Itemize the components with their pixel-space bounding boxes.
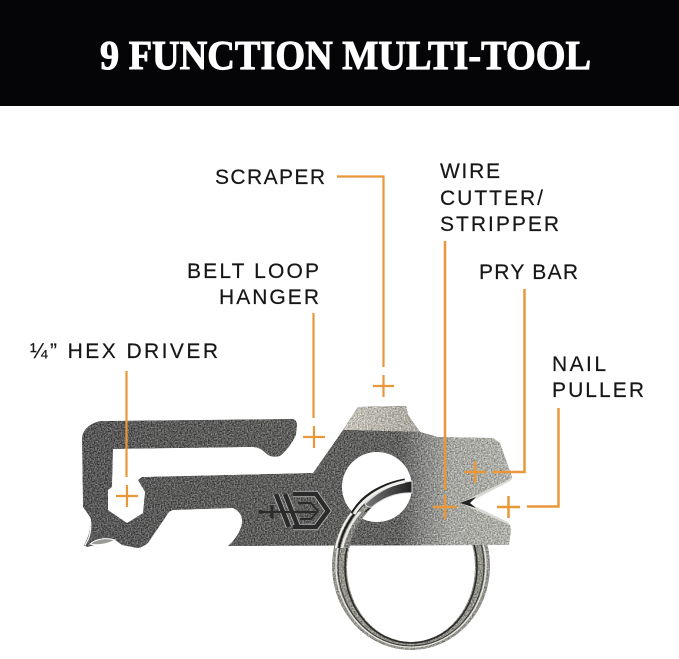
ring band inside hole — [365, 481, 412, 507]
Gerber logo — [259, 494, 328, 527]
callout: hex driver — [116, 371, 138, 507]
label: wire cutter/stripper: WIRE — [440, 160, 500, 183]
ring highlight over hole edge — [353, 481, 405, 514]
callout: nail puller — [497, 408, 558, 518]
multi-tool body — [82, 406, 512, 548]
label: belt loop hanger: BELT LOOP — [187, 260, 319, 283]
label: wire cutter/stripper: CUTTER/ — [440, 187, 543, 210]
label: wire cutter/stripper: STRIPPER — [440, 213, 559, 236]
label: belt loop hanger: HANGER — [219, 286, 319, 309]
label: belt loop hanger — [187, 260, 319, 309]
callout: scraper — [337, 176, 394, 397]
label: nail puller: PULLER — [552, 379, 644, 402]
callout: wire cutter — [433, 241, 457, 519]
scraper highlight — [343, 406, 420, 432]
key ring (front of tool) — [334, 478, 412, 548]
title banner — [0, 0, 679, 106]
label: nail puller — [552, 353, 644, 402]
label: nail puller: NAIL — [552, 353, 606, 376]
callout: belt loop hanger — [303, 313, 325, 448]
callout: pry bar — [464, 289, 524, 483]
label: wire cutter/stripper — [440, 160, 559, 236]
label: pry bar: PRY BAR — [479, 261, 578, 284]
label: hex driver: ¼” HEX DRIVER — [30, 340, 218, 363]
wire cutter notch — [460, 478, 512, 525]
title: 9 FUNCTION MULTI-TOOL — [100, 32, 591, 78]
label: scraper: SCRAPER — [215, 166, 325, 189]
bevel at bottom-left point — [85, 518, 115, 545]
key ring (behind tool) — [332, 482, 490, 650]
